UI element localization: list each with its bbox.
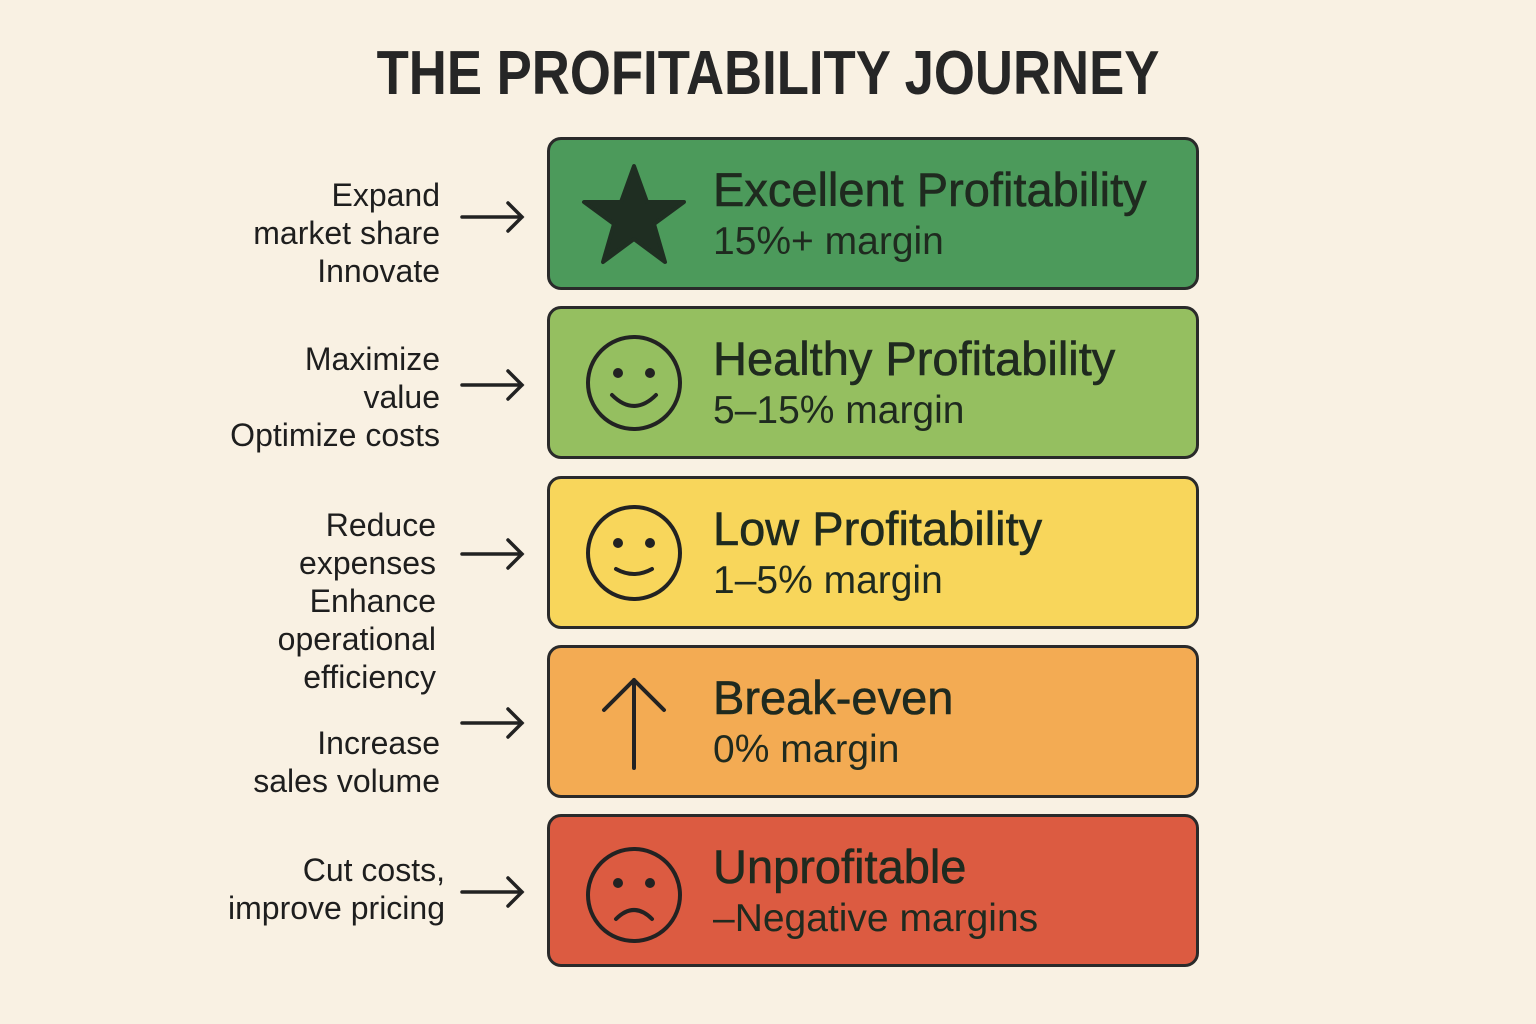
icon: frown: [586, 847, 682, 943]
text: healthy actions: Optimize costs: [230, 417, 440, 453]
panel: healthy: [547, 306, 1199, 459]
margin text: 0% margin: [713, 728, 899, 771]
arrow 1: [460, 201, 524, 233]
heading: Unprofitable: [713, 840, 966, 893]
arrow 4: [460, 707, 524, 739]
text: low actions: [278, 507, 436, 695]
margin text: 1–5% margin: [713, 559, 943, 602]
margin text: –Negative margins: [713, 897, 1038, 940]
panel: unprofitable: [547, 814, 1199, 967]
text: break-even actions: [253, 725, 440, 799]
margin text: 15%+ margin: [713, 220, 944, 263]
arrow 3: [460, 538, 524, 570]
margin text: 5–15% margin: [713, 389, 964, 432]
text: break-even actions: Increase: [317, 725, 440, 761]
heading: Excellent Profitability: [713, 163, 1147, 216]
panel: break-even: [547, 645, 1199, 798]
text: low actions: operational: [278, 621, 436, 657]
heading: Low Profitability: [713, 502, 1042, 555]
panel: low: [547, 476, 1199, 629]
text: excellent actions: Expand: [331, 177, 440, 213]
text: low actions: Enhance: [310, 583, 436, 619]
text: unprofitable actions: [228, 852, 445, 926]
panel: excellent: [547, 137, 1199, 290]
text: break-even actions: sales volume: [253, 763, 440, 799]
text: healthy actions: Maximize: [305, 341, 440, 377]
icon: smile: [586, 335, 682, 431]
heading: Break-even: [713, 671, 953, 724]
icon: slight smile: [586, 505, 682, 601]
icon: up arrow: [602, 678, 666, 770]
icon: star: [582, 164, 686, 264]
arrow 2: [460, 369, 524, 401]
text: low actions: efficiency: [303, 659, 436, 695]
text: low actions: Reduce: [326, 507, 436, 543]
text: excellent actions: market share: [253, 215, 440, 251]
text: healthy actions: [230, 341, 440, 453]
arrow 5: [460, 876, 524, 908]
text: low actions: expenses: [299, 545, 436, 581]
text: healthy actions: value: [364, 379, 440, 415]
heading: Healthy Profitability: [713, 332, 1115, 385]
text: excellent actions: Innovate: [317, 253, 440, 289]
text: unprofitable actions: Cut costs,: [303, 852, 445, 888]
text: excellent actions: [253, 177, 440, 289]
title: THE PROFITABILITY JOURNEY: [377, 39, 1159, 108]
text: unprofitable actions: improve pricing: [228, 890, 445, 926]
